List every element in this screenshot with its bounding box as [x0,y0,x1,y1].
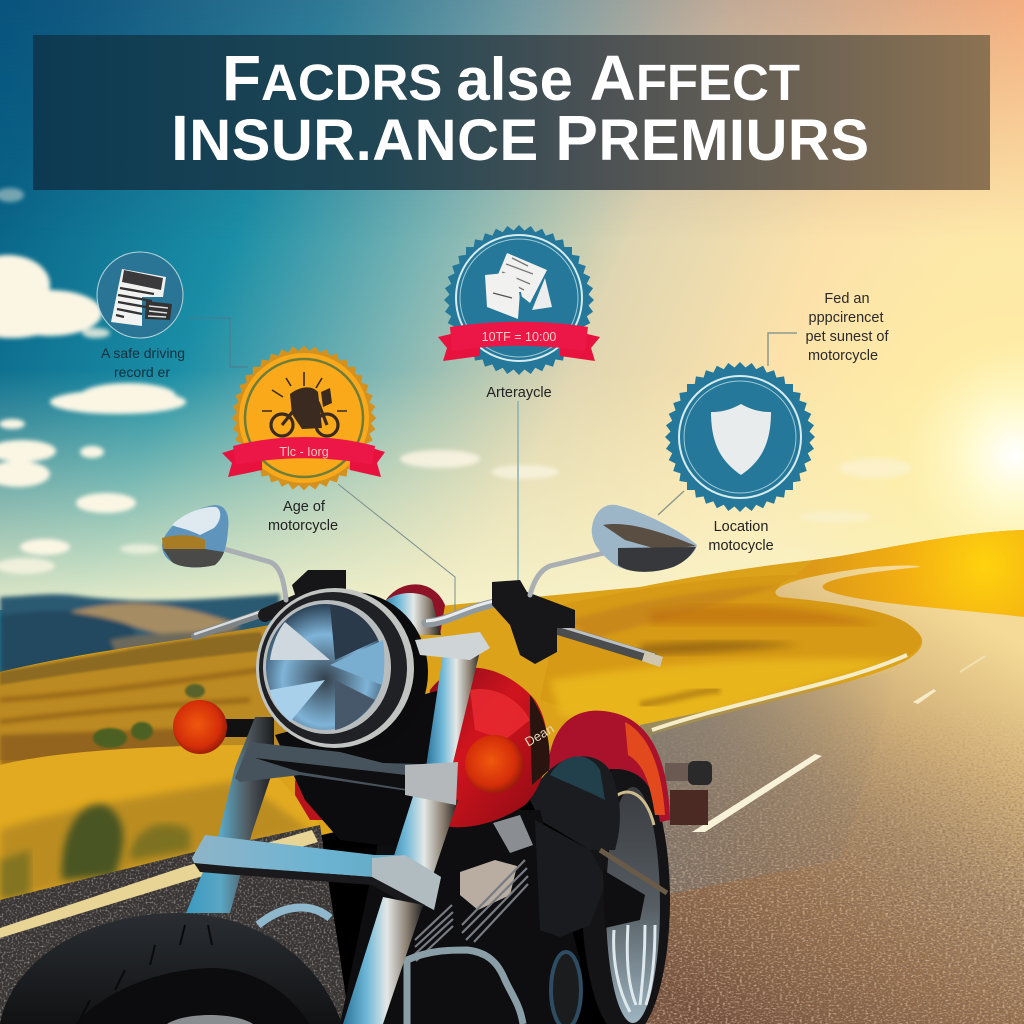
badge: shield [665,362,815,512]
label: experience: pet sunest of [805,329,889,345]
seat [530,756,620,850]
label: safe driving record [101,345,185,380]
mirror stems [203,543,625,600]
rear wheel [582,762,670,1024]
headlight [256,588,428,752]
label: location [708,519,774,554]
near right field [540,575,921,735]
label: safe driving record: A safe driving [101,345,185,361]
label: location: motocycle [708,538,774,554]
sunlit far hill [790,530,1024,617]
left handlebar [195,600,300,636]
upper fork clamp [235,742,458,805]
top right clamp [415,632,490,660]
label: age of motorcycle: motorcycle [268,518,338,534]
ribbon [222,437,385,477]
label: arteraycle: Arteraycle [486,385,552,401]
label: age of motorcycle [268,499,338,534]
front dark body [275,690,455,850]
front wheel [0,913,342,1024]
icon: papers and box [485,253,552,319]
title banner [33,35,990,190]
ribbon [438,322,600,361]
label: location: Location [714,519,768,535]
left indicator [173,700,255,754]
left fork [186,717,274,913]
badge: documents [438,225,600,375]
left mirror [162,505,228,567]
left field [0,625,300,760]
clouds [0,188,911,574]
sky background [0,0,1024,672]
road [640,566,1024,1024]
fuel tank [295,668,557,827]
ribbon: Tlc - Iorg [279,445,329,459]
title text line 1: FACDRS alse AFFECT [222,42,800,114]
engine [258,810,581,1024]
badge: age of motorcycle [222,346,385,490]
right fork lower [343,897,423,1024]
right handlebar [426,580,663,667]
golden fields [0,530,1024,905]
label: safe driving record: record er [114,364,170,380]
distant hills [0,594,280,680]
label: experience: Fed an [824,291,870,307]
label: experience [805,291,889,364]
right mirror [592,505,697,572]
red neck and chrome tube [380,584,445,635]
label: experience: pppcirencet [809,310,883,326]
right fork upper [426,647,481,767]
rear indicator [465,735,523,793]
label: experience: motorcycle [808,348,878,364]
motorcycle [0,505,712,1024]
roadside gravel, line and near road left [0,825,350,1024]
lower fork clamp [192,835,441,912]
title text line 2: INSUR.ANCE PREMIURS [171,102,869,174]
icon: shield [711,404,771,475]
icon: document record circle [97,252,183,338]
connector lines [187,318,797,612]
ribbon: 10TF = 10:00 [482,330,556,344]
icon: motorcycle [262,372,347,436]
fuel tank: Dean [522,721,557,749]
rear fender and light [548,711,712,825]
side cover and brace [535,820,667,937]
label: age of motorcycle: Age of [283,499,326,515]
top black mount [292,570,346,610]
